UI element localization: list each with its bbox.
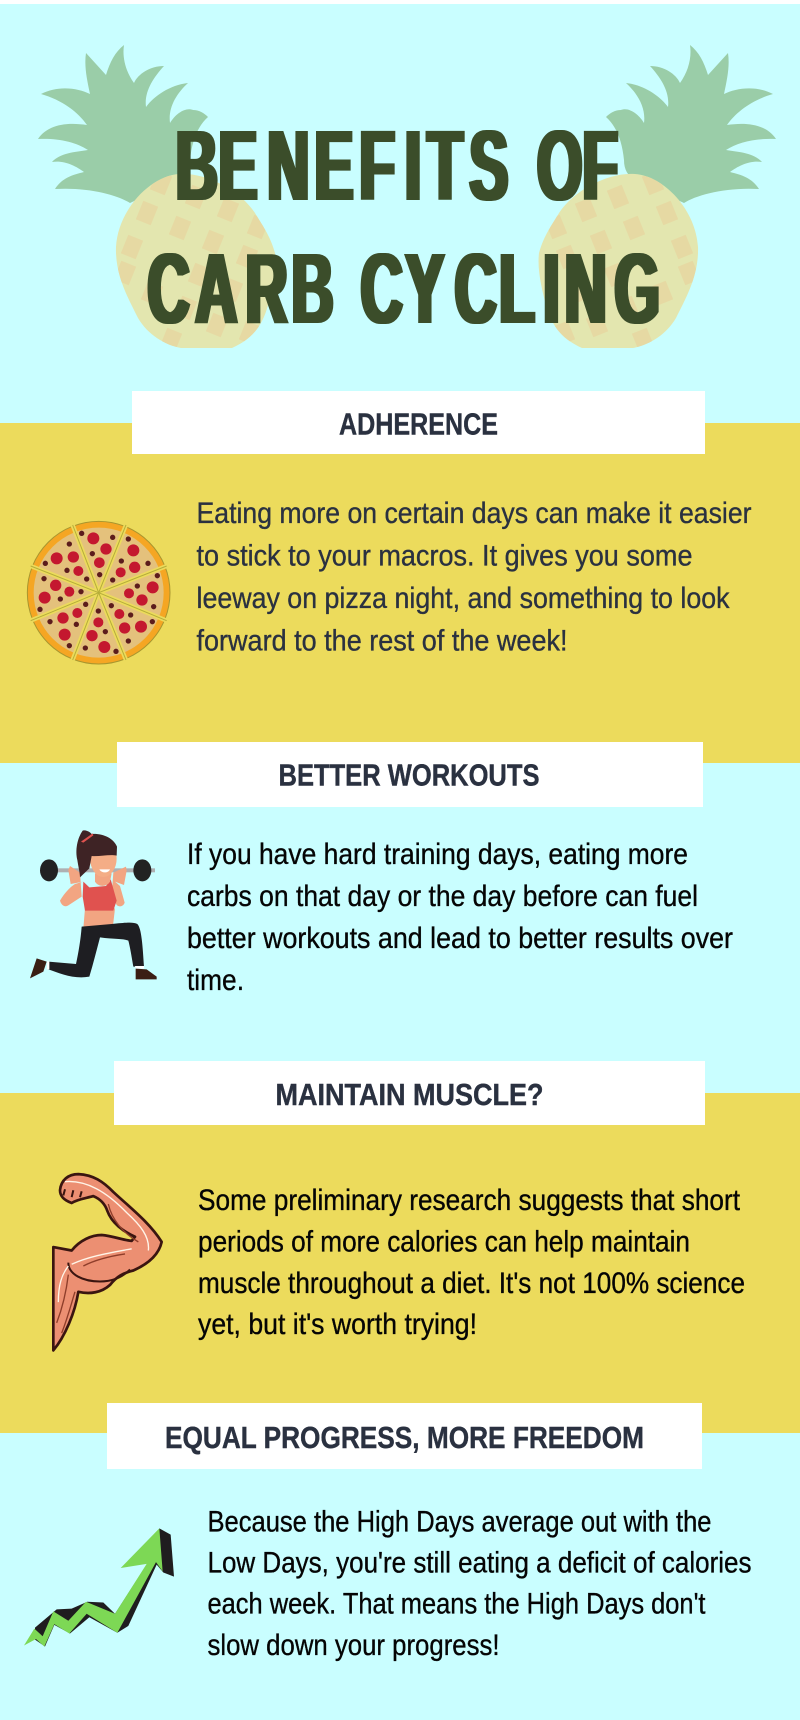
text block: adherence: leeway on pizza night, and something to look bbox=[196, 582, 730, 615]
text block: adherence: to stick to your macros. It gives you some bbox=[196, 540, 692, 572]
text block: better workouts: better workouts and lead to better results over bbox=[187, 922, 733, 955]
heading: equal progress, more freedom: EQUAL PROGRESS, MORE FREEDOM bbox=[165, 1420, 644, 1455]
heading: maintain muscle: MAINTAIN MUSCLE? bbox=[276, 1077, 544, 1112]
heading: adherence bbox=[132, 391, 705, 454]
text block: adherence: forward to the rest of the week! bbox=[196, 624, 568, 658]
text block: maintain muscle: periods of more calories can help maintain bbox=[198, 1226, 690, 1258]
text block: adherence bbox=[196, 497, 752, 658]
icon: flexed arm bbox=[53, 1174, 162, 1350]
text block: equal progress bbox=[208, 1506, 752, 1662]
icon: rising arrow bbox=[24, 1528, 174, 1647]
heading: equal progress, more freedom bbox=[107, 1403, 702, 1469]
icon: pizza bbox=[24, 518, 173, 667]
title bbox=[148, 111, 660, 345]
text block: maintain muscle: yet, but it's worth trying! bbox=[198, 1308, 477, 1341]
text block: better workouts: carbs on that day or the day before can fuel bbox=[187, 880, 698, 913]
icon: right pineapple bbox=[539, 45, 776, 352]
title: CARB CYCLING bbox=[148, 234, 660, 345]
text block: maintain muscle bbox=[198, 1184, 745, 1341]
text block: better workouts: If you have hard training days, eating more bbox=[187, 838, 688, 871]
icon: woman lunging with barbell bbox=[30, 830, 157, 979]
panel: maintain muscle band bbox=[0, 1093, 800, 1433]
text block: equal progress: Because the High Days average out with the bbox=[208, 1506, 712, 1538]
icon: left pineapple bbox=[38, 45, 275, 352]
heading: adherence: ADHERENCE bbox=[339, 406, 498, 442]
heading: better workouts bbox=[117, 742, 703, 807]
text block: maintain muscle: Some preliminary research suggests that short bbox=[198, 1184, 741, 1217]
heading: maintain muscle bbox=[114, 1061, 705, 1125]
text block: equal progress: slow down your progress! bbox=[208, 1629, 500, 1662]
text block: better workouts bbox=[187, 838, 733, 997]
title: BENEFITS OF bbox=[176, 111, 618, 222]
text block: better workouts: time. bbox=[187, 964, 244, 997]
heading: better workouts: BETTER WORKOUTS bbox=[278, 758, 540, 792]
text block: equal progress: each week. That means the High Days don't bbox=[208, 1588, 706, 1620]
panel: adherence band bbox=[0, 423, 800, 763]
